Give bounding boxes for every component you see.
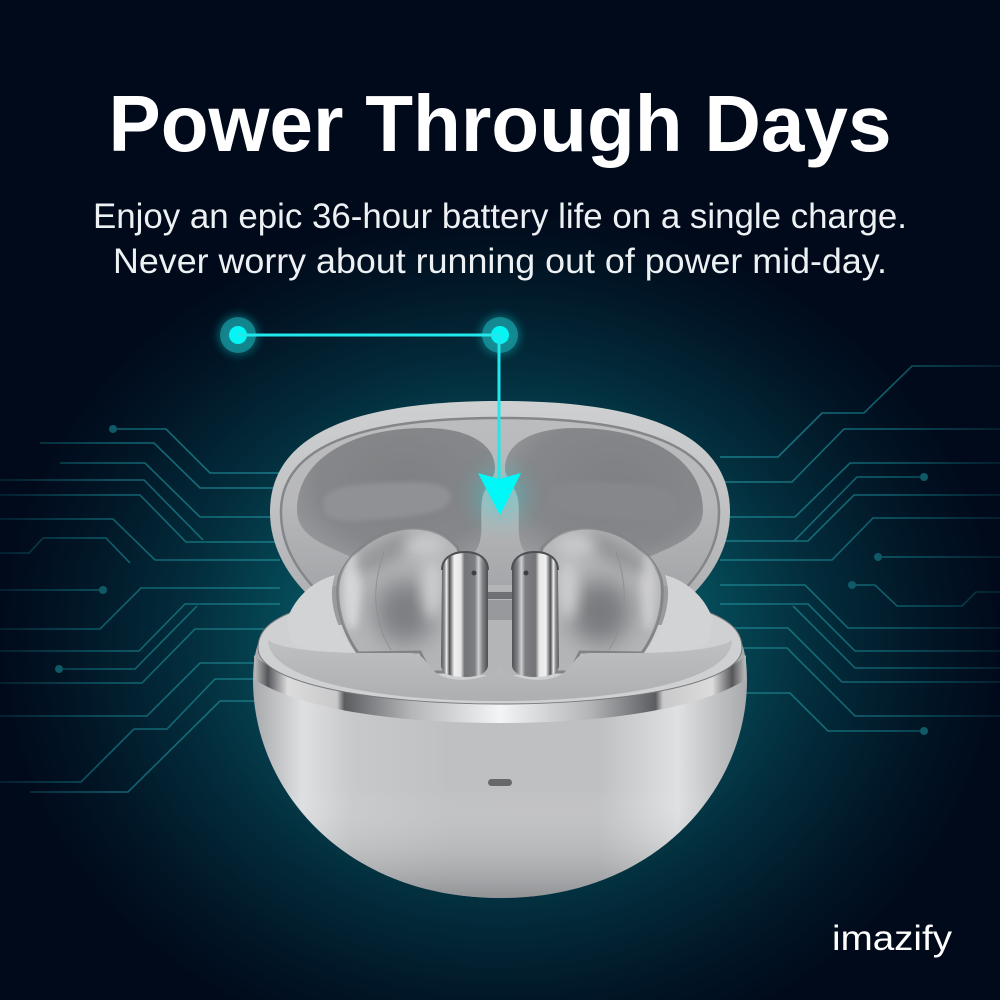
subtitle: [93, 197, 907, 281]
metal band: [254, 655, 746, 723]
subtitle: Enjoy an epic 36-hour battery life on a single charge.: [93, 197, 907, 236]
left pad: [287, 575, 358, 656]
callout pointer: [217, 314, 524, 519]
tray surface: [268, 640, 732, 701]
brand name: imazify: [832, 919, 953, 958]
teal glow: [0, 200, 1000, 1000]
case base bowl: [253, 622, 747, 898]
right earbud: [512, 525, 662, 677]
right pad: [642, 575, 713, 656]
product: open earbuds case: [253, 401, 747, 898]
circuit lines right: [720, 366, 1000, 735]
title: Power Through Days: [108, 79, 892, 168]
status LED: [488, 779, 512, 786]
centre post: [480, 585, 520, 675]
tray recess: [330, 586, 670, 625]
case lid: [270, 401, 730, 592]
subtitle: Never worry about running out of power mid-day.: [113, 242, 887, 281]
left earbud: [338, 525, 488, 677]
inner tray back: [258, 612, 742, 704]
circuit lines left: [0, 425, 280, 792]
